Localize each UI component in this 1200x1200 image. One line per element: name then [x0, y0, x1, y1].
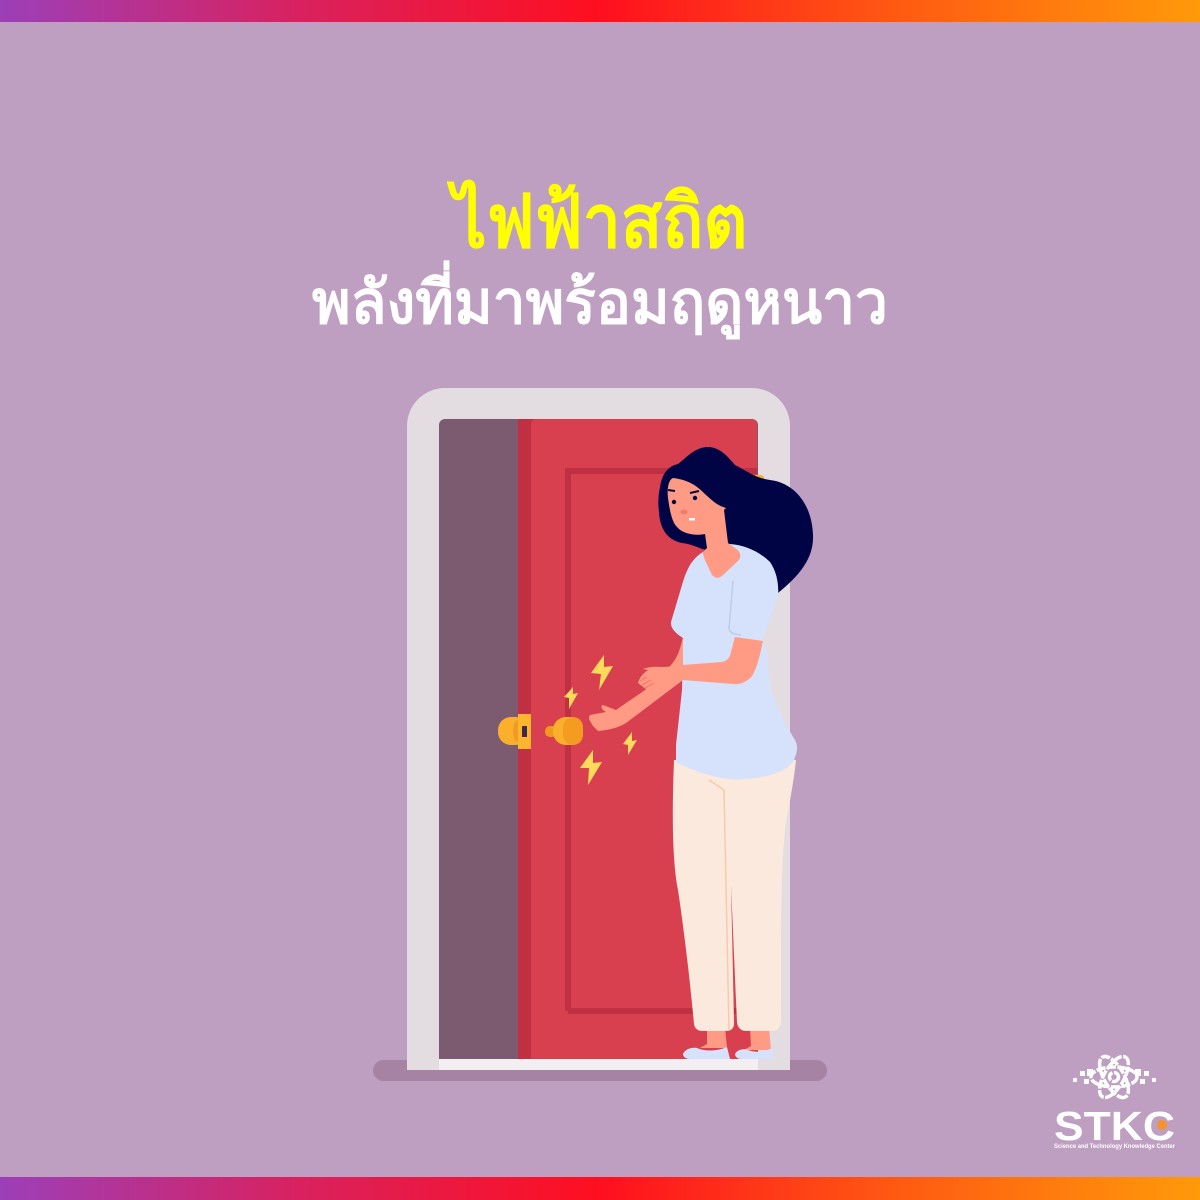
title — [312, 178, 888, 340]
STKC logo — [1054, 1052, 1176, 1150]
near arm — [589, 637, 683, 731]
threshold — [439, 1059, 758, 1070]
neck and face — [668, 478, 740, 578]
lightning bolts — [564, 655, 637, 785]
door knob — [498, 714, 583, 749]
hair — [658, 447, 813, 600]
door frame — [407, 388, 790, 1070]
top gradient bar — [0, 0, 1200, 22]
legs — [700, 1028, 727, 1048]
door opening — [439, 419, 758, 1059]
shirt — [671, 544, 797, 780]
icon: atom — [1091, 1052, 1137, 1102]
title: ไฟฟ้าสถิต — [446, 178, 748, 263]
pixel dots — [1073, 1069, 1156, 1084]
floor shadow — [373, 1060, 827, 1081]
door — [518, 419, 757, 1059]
face details — [668, 490, 699, 520]
title: พลังที่มาพร้อมฤดูหนาว — [312, 260, 888, 340]
wordmark: STKC — [1054, 1103, 1175, 1149]
hair clip — [753, 475, 764, 483]
woman — [589, 447, 813, 1059]
sleeve seam — [729, 581, 741, 635]
tagline: Science and Technology Knowledge Center — [1054, 1144, 1176, 1150]
far arm — [638, 637, 763, 690]
hand lines — [640, 677, 654, 688]
pants — [673, 760, 796, 1031]
bottom gradient bar — [0, 1177, 1200, 1200]
shoes — [683, 1047, 730, 1059]
